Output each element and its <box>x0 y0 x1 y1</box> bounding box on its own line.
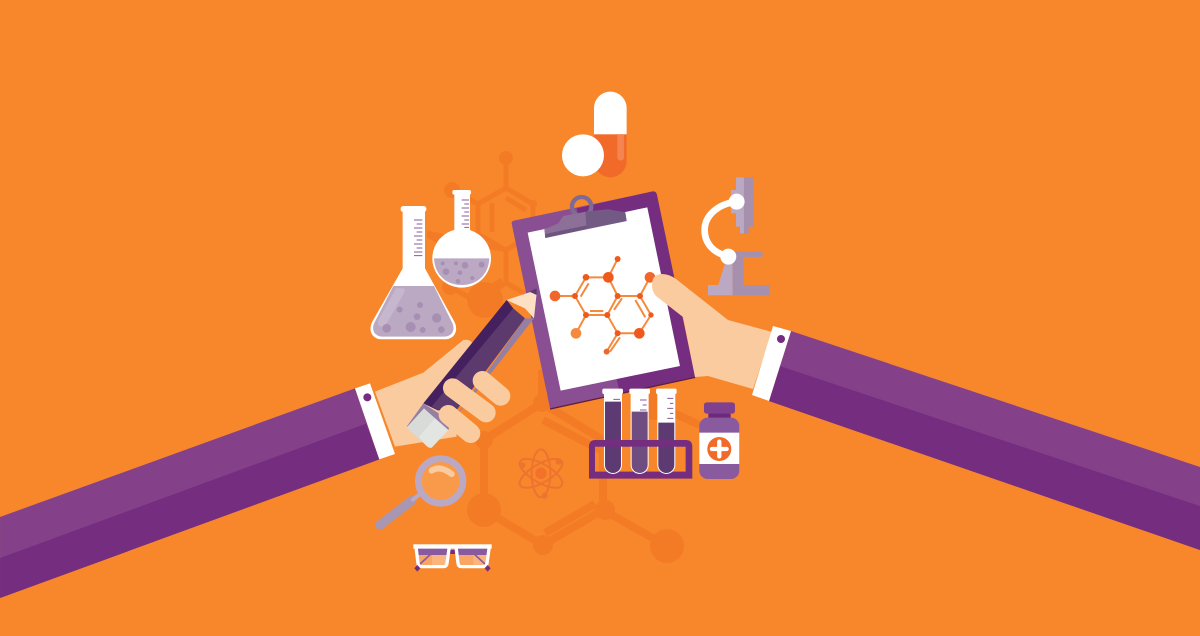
left cuff <box>355 383 395 459</box>
right sleeve <box>769 331 1200 550</box>
icon: glasses <box>413 544 492 572</box>
right arm <box>652 274 1200 550</box>
clipboard <box>512 191 695 410</box>
right hand <box>652 274 772 389</box>
pencil <box>407 288 537 448</box>
left sleeve <box>0 388 379 598</box>
clipboard paper <box>528 207 680 391</box>
background molecule: bottom <box>467 370 700 563</box>
clipboard board <box>512 191 695 408</box>
icon: capsule and pill <box>562 92 627 177</box>
icon: medicine bottle <box>699 402 739 479</box>
background molecule: top <box>427 151 537 318</box>
icon: test tubes in rack <box>589 389 692 479</box>
icon: microscope <box>705 177 770 295</box>
icon: atom <box>516 449 566 499</box>
icon: round flask <box>432 190 491 288</box>
icon: magnifying glass <box>380 459 463 525</box>
left arm with pencil <box>0 288 537 598</box>
paper molecule <box>550 256 655 355</box>
fingers <box>448 381 501 433</box>
clip <box>544 197 627 238</box>
right cuff <box>752 326 791 401</box>
left hand <box>375 340 474 447</box>
icon: conical flask <box>371 206 456 339</box>
left cuff button <box>363 393 371 401</box>
right cuff button <box>777 335 785 343</box>
